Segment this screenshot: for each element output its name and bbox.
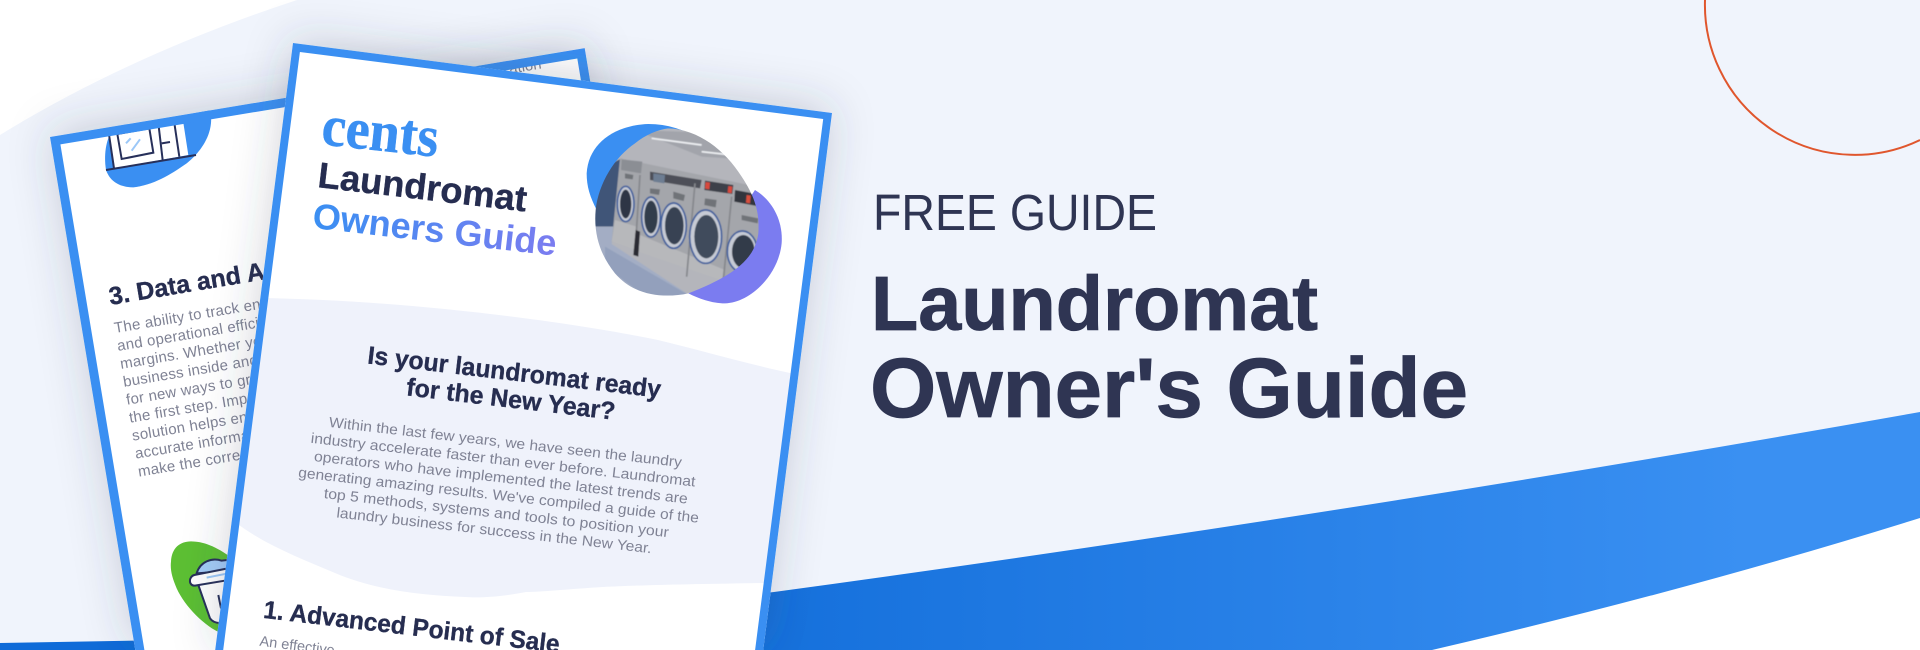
- drums: [617, 186, 757, 272]
- body paragraph (partly hidden): solution helps en: [131, 409, 249, 445]
- front page border: [215, 43, 832, 650]
- back document page: [50, 48, 685, 650]
- body paragraph (partly hidden): margins. Whether yo: [119, 333, 263, 373]
- heading: ready for the New Year: for the New Year?: [405, 373, 617, 426]
- logo: cents: cents: [319, 93, 442, 170]
- intro paragraph: Within the last few years, we have seen the laundry: [328, 415, 683, 471]
- photo blob: laundromat washers: [585, 120, 785, 310]
- headline block: [870, 184, 1468, 435]
- intro paragraph: laundry business for success in the New Year.: [336, 505, 652, 557]
- page title: [310, 152, 564, 267]
- page title: Owners Guide: [311, 195, 559, 264]
- icon: laundry basket on green blob: [170, 541, 228, 632]
- page title: Laundromat: [316, 154, 529, 219]
- decorative orange circle: [1705, 0, 1920, 155]
- heading: ready for the New Year: [363, 338, 663, 433]
- blue swoosh band: [0, 412, 1920, 650]
- intro paragraph: generating amazing results. We've compiled a guide of the: [297, 465, 700, 527]
- intro paragraph: [293, 407, 707, 567]
- body paragraph (partly hidden): the first step. Imp: [128, 390, 249, 427]
- body paragraph (partly hidden): for new ways to gr: [125, 371, 252, 409]
- body paragraph (partly hidden): accurate informa: [134, 427, 251, 463]
- front page text: [255, 90, 747, 650]
- icon: washer on blue blob: [105, 110, 211, 187]
- heading: 3. Data and Analytics: 3. Data and Analytics: [107, 242, 359, 311]
- back page text: [82, 56, 598, 481]
- back page border: [50, 48, 685, 650]
- body paragraph (partly hidden): business inside and: [122, 352, 259, 391]
- intro paragraph: industry accelerate faster than ever before. Laundromat: [310, 431, 696, 491]
- body paragraph (partly hidden): [113, 296, 286, 481]
- body paragraph (partly hidden): make the corre: [137, 447, 242, 481]
- title line 1: Laundromat: [871, 261, 1318, 347]
- text fragment at top: ation: [508, 56, 543, 78]
- intro paragraph: operators who have implemented the latest trends are: [313, 449, 689, 508]
- body paragraph (partly hidden): The ability to track en: [113, 296, 262, 337]
- body paragraph (partly hidden): and operational effici: [116, 315, 260, 355]
- front document page: [215, 43, 832, 650]
- pale section of page: [235, 298, 800, 597]
- heading: ready for the New Year: Is your laundromat ready: [366, 341, 663, 404]
- intro paragraph: top 5 methods, systems and tools to position your: [323, 486, 670, 541]
- title line 2: Owner's Guide: [870, 341, 1468, 435]
- label: FREE GUIDE: FREE GUIDE: [873, 184, 1157, 241]
